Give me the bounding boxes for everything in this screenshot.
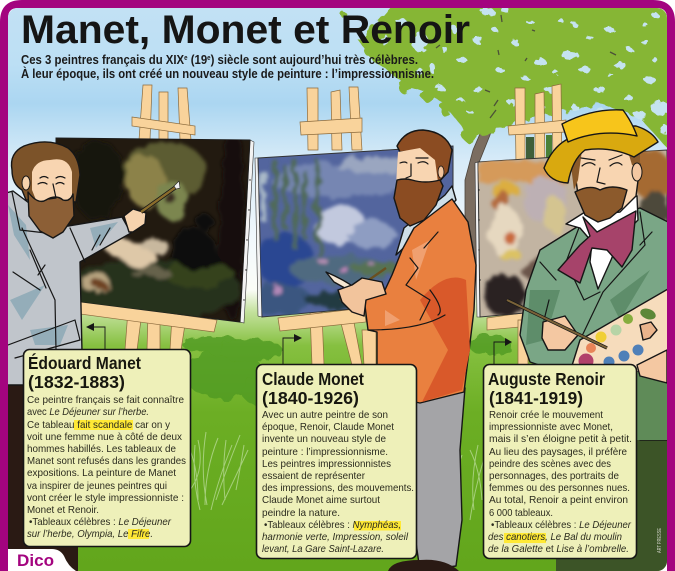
palette and brush (326, 268, 386, 300)
shirt and collar (566, 196, 638, 289)
painting: Le Déjeuner sur l'herbe (56, 120, 254, 323)
name and dates (262, 369, 364, 408)
name and dates (488, 369, 605, 408)
hand (338, 278, 386, 316)
highlight (354, 521, 401, 530)
highlight (504, 533, 546, 543)
body text: Au lieu des paysages, il préfère (489, 447, 627, 458)
body text: •Tableaux célèbres : Nymphéas, (264, 520, 401, 531)
highlights (74, 420, 149, 539)
connector arrow: Manet (86, 323, 105, 349)
body text: Avec un autre peintre de son (262, 410, 388, 421)
body text: impressionniste avec Monet, (489, 422, 613, 433)
brush (507, 300, 607, 348)
body text (262, 410, 414, 555)
coat (6, 191, 131, 385)
body text: Les peintres impressionnistes (262, 459, 391, 470)
body text: peindre des scènes avec des (489, 459, 611, 470)
intro text: À leur époque, ils ont créé un nouveau style de peinture : l’impressionnisme. (21, 66, 434, 81)
easel: Renoir (487, 84, 566, 365)
eyes and nose (38, 176, 65, 199)
hat (544, 110, 658, 183)
body text: époque, Renoir, Claude Monet (262, 422, 394, 433)
name and dates: Claude Monet (262, 369, 364, 389)
scarf (396, 186, 456, 255)
body text: •Tableaux célèbres : Le Déjeuner (29, 517, 171, 528)
body text: levant, La Gare Saint-Lazare. (262, 544, 384, 555)
brush (141, 181, 180, 212)
hair sides (570, 145, 640, 190)
bow tie (558, 211, 636, 283)
hand (124, 209, 146, 232)
easel: Monet (278, 87, 376, 365)
thumb (640, 322, 657, 340)
jacket (520, 208, 675, 440)
hair (397, 130, 452, 183)
beard (394, 179, 443, 226)
body text: avec Le Déjeuner sur l’herbe. (27, 407, 149, 418)
eyes and nose (581, 155, 622, 184)
ear (438, 166, 444, 178)
figure: Monet (326, 130, 476, 571)
easel: Manet (80, 85, 217, 350)
name and dates: Édouard Manet (28, 352, 141, 373)
body text: Claude Monet aime surtout (262, 495, 380, 506)
body text: va inspirer de jeunes peintres qui (27, 481, 167, 492)
name and dates: (1832-1883) (28, 372, 125, 392)
name and dates (28, 352, 141, 392)
hair (12, 142, 80, 202)
body text: •Tableaux célèbres : Le Déjeuner (491, 520, 631, 531)
connector arrow: Monet (283, 334, 302, 364)
title: Manet, Monet et Renoir (21, 8, 470, 52)
ear (22, 176, 30, 190)
body text: mais il s’en éloigne petit à petit. (489, 434, 632, 445)
intro text: Ces 3 peintres français du XIX (21, 52, 207, 67)
body text: vont créer le style impressionniste : (27, 493, 184, 504)
right hand (637, 350, 667, 383)
name and dates: Auguste Renoir (488, 369, 605, 389)
figure: Manet (6, 142, 180, 571)
palette (572, 288, 667, 372)
body text: expositions. La peinture de Manet (27, 468, 176, 479)
body text: Monet et Renoir. (27, 505, 99, 516)
face (396, 148, 438, 185)
body text: des impressions, des mouvements. (262, 483, 414, 494)
Dico tab (8, 549, 76, 571)
face (572, 142, 640, 215)
body text: Au total, Renoir a peint environ (489, 495, 628, 506)
body text: invente un nouveau style de (262, 434, 386, 445)
body text: Ce tableau fait scandale car on y (27, 420, 171, 431)
credit: ART PRESSE (657, 527, 663, 553)
intro text: e (184, 55, 188, 62)
tree trunk (464, 133, 491, 261)
name and dates: (1840-1926) (262, 388, 359, 408)
dark coat bottom (556, 440, 667, 571)
body text: Manet sont refusés dans les grandes (27, 456, 186, 467)
beard (28, 192, 74, 238)
body text: femmes ou des personnes nues. (489, 483, 630, 494)
body text: essaient de représenter (262, 471, 366, 482)
figure: Renoir (507, 110, 675, 571)
eyes and nose (400, 158, 428, 178)
body text (488, 410, 632, 555)
body text (27, 395, 186, 540)
left hand (542, 316, 578, 350)
trousers (8, 378, 78, 571)
face (32, 159, 72, 201)
body text: des canotiers, Le Bal du moulin (488, 532, 622, 543)
trousers (417, 387, 466, 567)
beard (575, 187, 627, 222)
card: Auguste Renoir (484, 364, 636, 558)
body text: Ce peintre français se fait connaître (27, 395, 184, 406)
body text: personnages, des portraits de (489, 471, 619, 482)
name and dates: (1841-1919) (489, 388, 583, 408)
body text: peinture : l’impressionnisme. (262, 447, 388, 458)
coat (364, 199, 476, 403)
body text: de la Galette et Lise à l’ombrelle. (488, 544, 629, 555)
body text: harmonie verte, Impression, soleil (262, 532, 409, 543)
body text: 6 000 tableaux. (489, 508, 553, 519)
body text: Renoir crée le mouvement (489, 410, 603, 421)
body text: hommes habillés. Les tableaux de (27, 444, 176, 455)
shoe (388, 560, 459, 571)
body text: voit une femme nue à côté de deux (27, 432, 183, 443)
tree foliage (341, 0, 675, 150)
card: Claude Monet (256, 364, 416, 558)
intro text: e (207, 55, 211, 62)
card: Édouard Manet (24, 350, 190, 546)
intro text (21, 52, 434, 81)
body text: sur l’herbe, Olympia, Le Fifre. (27, 529, 153, 540)
ear (632, 163, 642, 181)
intro text: (19 (188, 52, 207, 67)
connector arrow: Renoir (494, 338, 512, 364)
body text: peindre la nature. (262, 508, 340, 519)
sleeve (636, 372, 667, 440)
painting: Nymphéas (248, 146, 453, 317)
intro text: ) siècle sont aujourd’hui très célèbres. (211, 52, 418, 67)
painting: Le Déjeuner des canotiers (475, 150, 674, 317)
grass (183, 335, 512, 520)
Dico tab: Dico (17, 552, 54, 570)
